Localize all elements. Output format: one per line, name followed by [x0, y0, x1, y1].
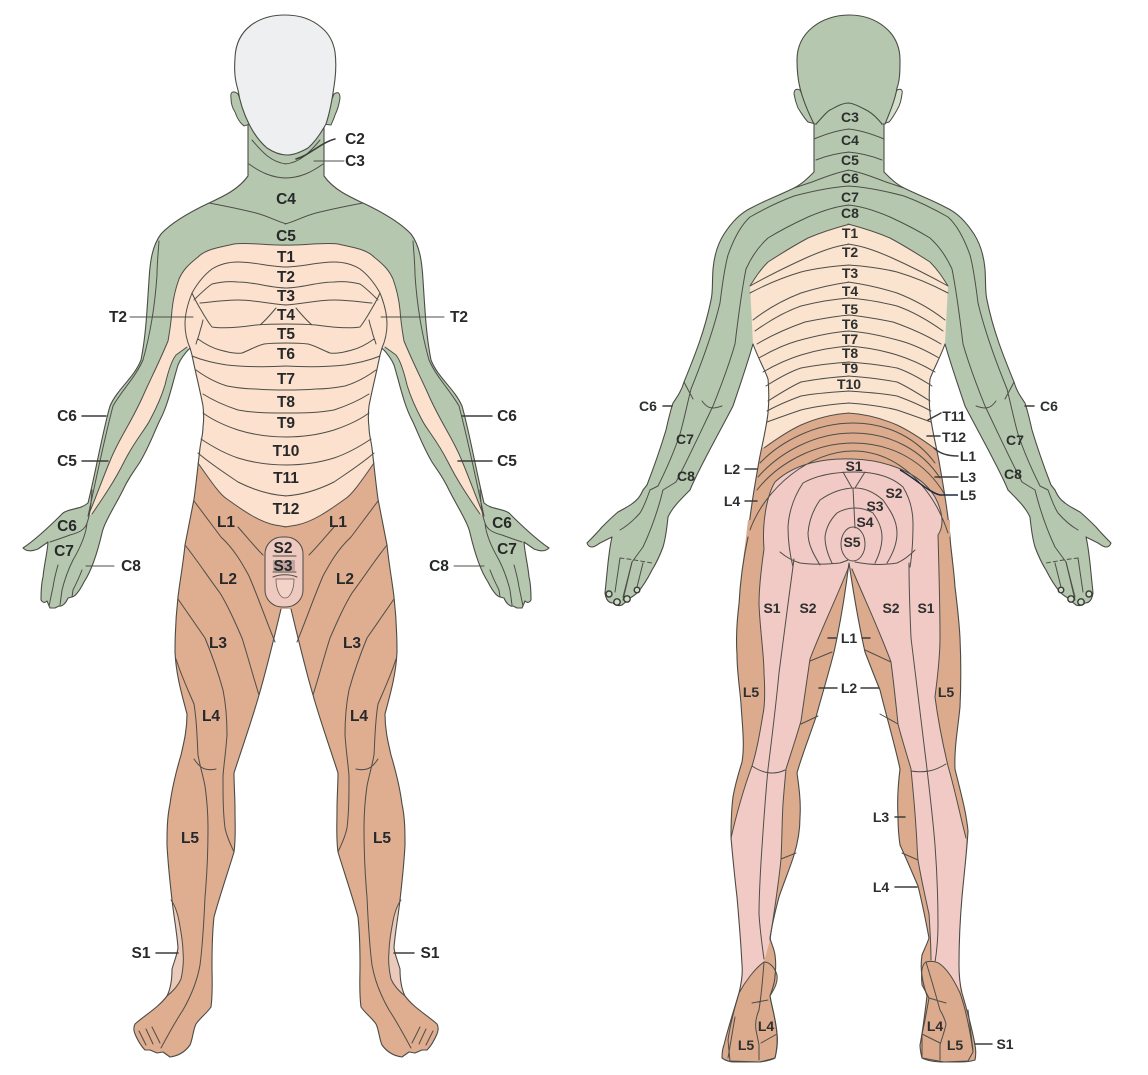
callout: foot S1	[975, 1036, 1014, 1052]
back torso and arm outline	[587, 120, 814, 606]
S5 ring	[841, 527, 865, 561]
label: C4: C4	[276, 191, 296, 208]
label: T7: T7	[842, 331, 858, 347]
callout: right S1	[394, 945, 440, 962]
label: T1: T1	[842, 225, 858, 241]
label: T4: T4	[277, 307, 295, 324]
callout: L1 inner thighs: L1	[841, 630, 857, 646]
callout: C2	[296, 131, 365, 159]
back head	[797, 15, 900, 124]
label: C6: C6	[841, 170, 859, 186]
label: left leg S2: S2	[799, 600, 817, 616]
label: right C8: C8	[1004, 466, 1022, 482]
front dermatome labels	[54, 131, 517, 962]
label: right leg S2: S2	[882, 600, 900, 616]
callout: L1	[934, 448, 976, 464]
panel: front view figure	[0, 15, 572, 1075]
back right half mirrored	[848, 100, 1138, 620]
callout: foot S1: S1	[996, 1036, 1014, 1052]
label: C7: C7	[841, 189, 859, 205]
label: left L5: L5	[181, 830, 199, 847]
label: T10: T10	[837, 376, 861, 392]
label: T8: T8	[842, 345, 858, 361]
label: right foot L5: L5	[947, 1037, 963, 1053]
callout: right C6	[462, 408, 517, 425]
back legs base with outline	[722, 520, 976, 1062]
label: T2: T2	[277, 269, 295, 286]
label: T8: T8	[277, 394, 295, 411]
label: S4: S4	[856, 514, 874, 530]
callout: L1 inner thighs	[828, 630, 870, 646]
callout: left C8	[86, 558, 141, 575]
label: right L5: L5	[938, 684, 954, 700]
callout: L4	[724, 493, 757, 509]
label: right L3: L3	[343, 635, 361, 652]
label: right L5: L5	[373, 830, 391, 847]
label: T5: T5	[277, 326, 295, 343]
label: left L4: L4	[202, 708, 220, 725]
callout: C2: C2	[345, 131, 365, 148]
callout: left C6: C6	[639, 398, 657, 414]
callout: T11: T11	[942, 408, 966, 424]
label: sacral S1: S1	[845, 458, 863, 474]
label: sacral S2: S2	[885, 485, 903, 501]
callout: T11	[928, 408, 966, 424]
label: C5: C5	[841, 152, 859, 168]
callout: right C8	[429, 558, 484, 575]
back legs outline	[722, 537, 976, 1062]
label: left L3: L3	[209, 635, 227, 652]
label: right hand C7: C7	[497, 541, 517, 558]
callout: right C8: C8	[429, 558, 449, 575]
label: T1: T1	[277, 249, 295, 266]
hand details	[49, 490, 92, 606]
label: T11: T11	[273, 470, 299, 487]
callout: left C6: C6	[57, 408, 77, 425]
sacral pink region	[731, 459, 966, 993]
callout: left T2: T2	[109, 309, 127, 326]
icon: right foot sole	[921, 961, 973, 1062]
back left half of torso and arm	[560, 100, 850, 620]
callout: left C6	[639, 398, 672, 414]
front dermatome boundary lines	[88, 140, 287, 1048]
front body regions	[0, 100, 287, 1075]
callout: right S1: S1	[421, 945, 440, 962]
label: C4: C4	[841, 132, 859, 148]
callout: L3: L3	[960, 469, 976, 485]
icon: front ears	[231, 92, 340, 126]
label: T6: T6	[842, 316, 858, 332]
callout: L5: L5	[960, 487, 976, 503]
label: T6: T6	[277, 346, 295, 363]
panel: back view figure	[560, 15, 1138, 1062]
callout: left S1: S1	[132, 945, 151, 962]
label: right hand C6: C6	[492, 515, 512, 532]
front body outline	[23, 120, 281, 1057]
lumbar and sacral boundary lines	[728, 423, 973, 1060]
back dermatome labels	[639, 62, 1058, 1053]
callout: L3 calf: L3	[873, 809, 889, 825]
callout: left C6	[57, 408, 106, 425]
callout: L4: L4	[724, 493, 740, 509]
icon: left foot sole	[728, 962, 777, 1062]
label: C8: C8	[841, 205, 859, 221]
callout: right C6	[1025, 398, 1058, 414]
label: T3: T3	[277, 288, 295, 305]
label: left hand C7: C7	[54, 543, 74, 560]
label: right leg S1: S1	[917, 600, 935, 616]
callout: right T2: T2	[450, 309, 468, 326]
callout: L2	[724, 461, 757, 477]
label: left L5: L5	[743, 684, 759, 700]
callout: left S1	[132, 945, 178, 962]
label: left C7: C7	[676, 431, 694, 447]
icon: back ears	[794, 89, 902, 124]
label: T4: T4	[842, 283, 858, 299]
callout: L2 inner thighs: L2	[841, 680, 857, 696]
label: T9: T9	[842, 360, 858, 376]
label: C5: C5	[276, 228, 296, 245]
callout: right C5: C5	[497, 453, 517, 470]
callout: L4 calf	[873, 879, 917, 895]
callout: right C5	[458, 453, 517, 470]
callout: left C5	[57, 453, 108, 470]
label: S5: S5	[843, 534, 861, 550]
label: T12: T12	[273, 501, 299, 518]
callout: L3 calf	[873, 809, 905, 825]
label: left C8: C8	[677, 468, 695, 484]
label: C3: C3	[841, 109, 859, 125]
label: right L4: L4	[350, 708, 368, 725]
front head blank area	[235, 15, 336, 155]
callout: L4 calf: L4	[873, 879, 889, 895]
label: left L2: L2	[219, 571, 237, 588]
callout: C3: C3	[345, 153, 365, 170]
label: left hand C6: C6	[57, 518, 77, 535]
label: T10: T10	[273, 443, 299, 460]
label: S2: S2	[274, 540, 292, 557]
label: right C7: C7	[1006, 432, 1024, 448]
callout: left C8: C8	[121, 558, 141, 575]
back fingernails	[606, 587, 640, 605]
callout: T12	[927, 429, 966, 445]
label: C2: C2	[842, 62, 860, 78]
callout: left T2	[109, 309, 193, 326]
label: right L2: L2	[336, 571, 354, 588]
label: right L1: L1	[329, 514, 347, 531]
front right half mirrored	[285, 100, 572, 1075]
label: S3: S3	[866, 498, 884, 514]
label: T2: T2	[842, 244, 858, 260]
callout: L3	[935, 469, 976, 485]
callout: C3	[314, 153, 365, 170]
label: T9: T9	[277, 415, 295, 432]
label: T5: T5	[842, 301, 858, 317]
back hand details	[615, 558, 643, 597]
callout: right C6: C6	[1040, 398, 1058, 414]
label: S3: S3	[274, 558, 293, 575]
front left half of the body with dermatome lines	[0, 100, 287, 1075]
callout: L2 inner thighs	[819, 680, 879, 696]
label: left foot L4: L4	[758, 1018, 774, 1034]
groin patch S2 S3	[265, 537, 303, 607]
callout: right T2	[381, 309, 468, 326]
callout: L2: L2	[724, 461, 740, 477]
label: T3: T3	[842, 265, 858, 281]
callout: L5	[900, 470, 976, 503]
label: T7: T7	[277, 371, 295, 388]
label: left foot L5: L5	[738, 1037, 754, 1053]
label: right foot L4: L4	[927, 1018, 943, 1034]
callout: L1: L1	[960, 448, 976, 464]
callout: right C6: C6	[497, 408, 517, 425]
label: left L1: L1	[217, 514, 235, 531]
back knuckle dashes	[620, 558, 652, 563]
callout: T12: T12	[942, 429, 966, 445]
label: left leg S1: S1	[763, 600, 781, 616]
back body regions	[560, 100, 850, 620]
callout: left C5: C5	[57, 453, 77, 470]
back dermatome boundary lines	[620, 129, 850, 600]
